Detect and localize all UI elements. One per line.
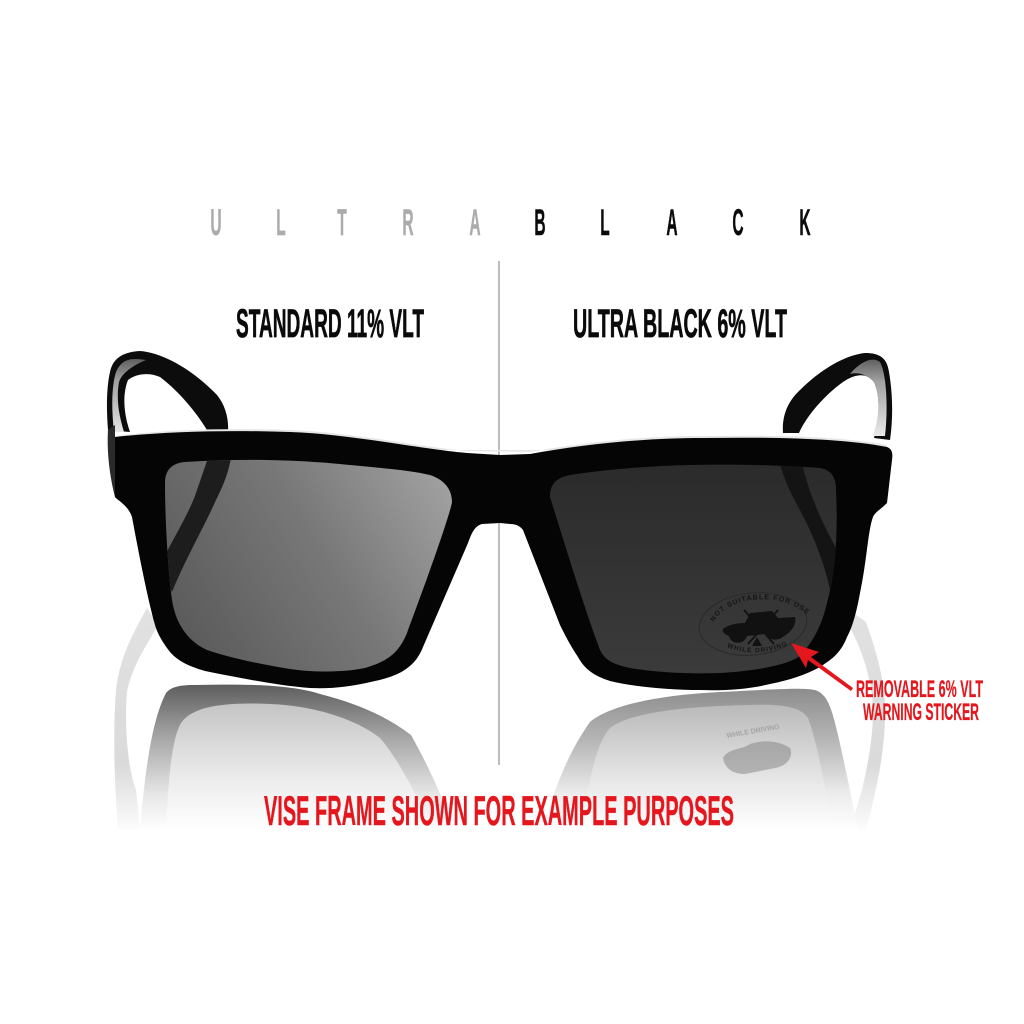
sticker outline xyxy=(696,588,810,660)
title word: ULTRA xyxy=(210,202,481,244)
frame top highlight xyxy=(115,429,887,452)
title: ULTRA BLACK xyxy=(210,202,811,244)
arm highlight xyxy=(850,360,887,436)
right lens: ultra black 6% VLT xyxy=(550,464,837,674)
arrow: points to warning sticker xyxy=(791,643,853,691)
arm highlight xyxy=(112,359,146,432)
reflection: sticker ghost xyxy=(723,724,791,774)
title word: ULTRA: T xyxy=(337,202,347,244)
temple shadow through lens xyxy=(780,466,836,590)
callout: removable warning sticker xyxy=(856,676,983,726)
left frame xyxy=(115,431,500,688)
title word: ULTRA: L xyxy=(276,202,286,244)
title word: BLACK: B xyxy=(534,202,546,244)
left hinge xyxy=(108,425,115,497)
sticker bottom text: WHILE DRIVING xyxy=(728,642,786,652)
left temple arm xyxy=(107,351,228,497)
reflection: right temple xyxy=(848,612,885,830)
reflection: right frame xyxy=(543,689,858,830)
right temple arm xyxy=(783,353,892,440)
sticker jeep icon xyxy=(723,611,795,643)
sticker warning triangle xyxy=(752,637,762,646)
title word: BLACK: K xyxy=(799,202,811,244)
title word: ULTRA: A xyxy=(469,202,481,244)
reflection: sticker ghost: WHILE DRIVING xyxy=(726,724,781,740)
title word: ULTRA: R xyxy=(402,202,414,244)
title word: BLACK: A xyxy=(666,202,678,244)
warning sticker xyxy=(698,592,810,656)
reflection: right lens xyxy=(580,705,832,830)
arm dark band xyxy=(783,353,892,440)
title word: BLACK: C xyxy=(732,202,744,244)
right frame xyxy=(500,438,892,690)
title word: BLACK: L xyxy=(600,202,610,244)
infographic canvas: ULTRA BLACK 6% VLT xyxy=(573,302,787,346)
sticker top text: NOT SUITABLE FOR USE xyxy=(710,594,810,622)
title word: BLACK xyxy=(534,202,811,244)
reflection of sunglasses on surface xyxy=(114,608,885,830)
reflection: left lens xyxy=(166,704,432,830)
temple shadow through lens xyxy=(168,460,230,592)
divider line xyxy=(498,261,500,765)
title word: ULTRA: U xyxy=(210,202,222,244)
left lens: standard 11% VLT xyxy=(160,458,452,672)
reflection: left temple xyxy=(114,608,158,830)
lens tint xyxy=(550,465,837,673)
infographic canvas xyxy=(106,208,983,826)
reflection: left frame xyxy=(140,685,454,830)
arm dark band xyxy=(107,351,228,432)
infographic canvas: STANDARD 11% VLT xyxy=(236,302,424,346)
sticker crossed-out lines xyxy=(744,610,778,644)
lens tint xyxy=(165,460,452,672)
sunglasses photo xyxy=(106,351,892,690)
